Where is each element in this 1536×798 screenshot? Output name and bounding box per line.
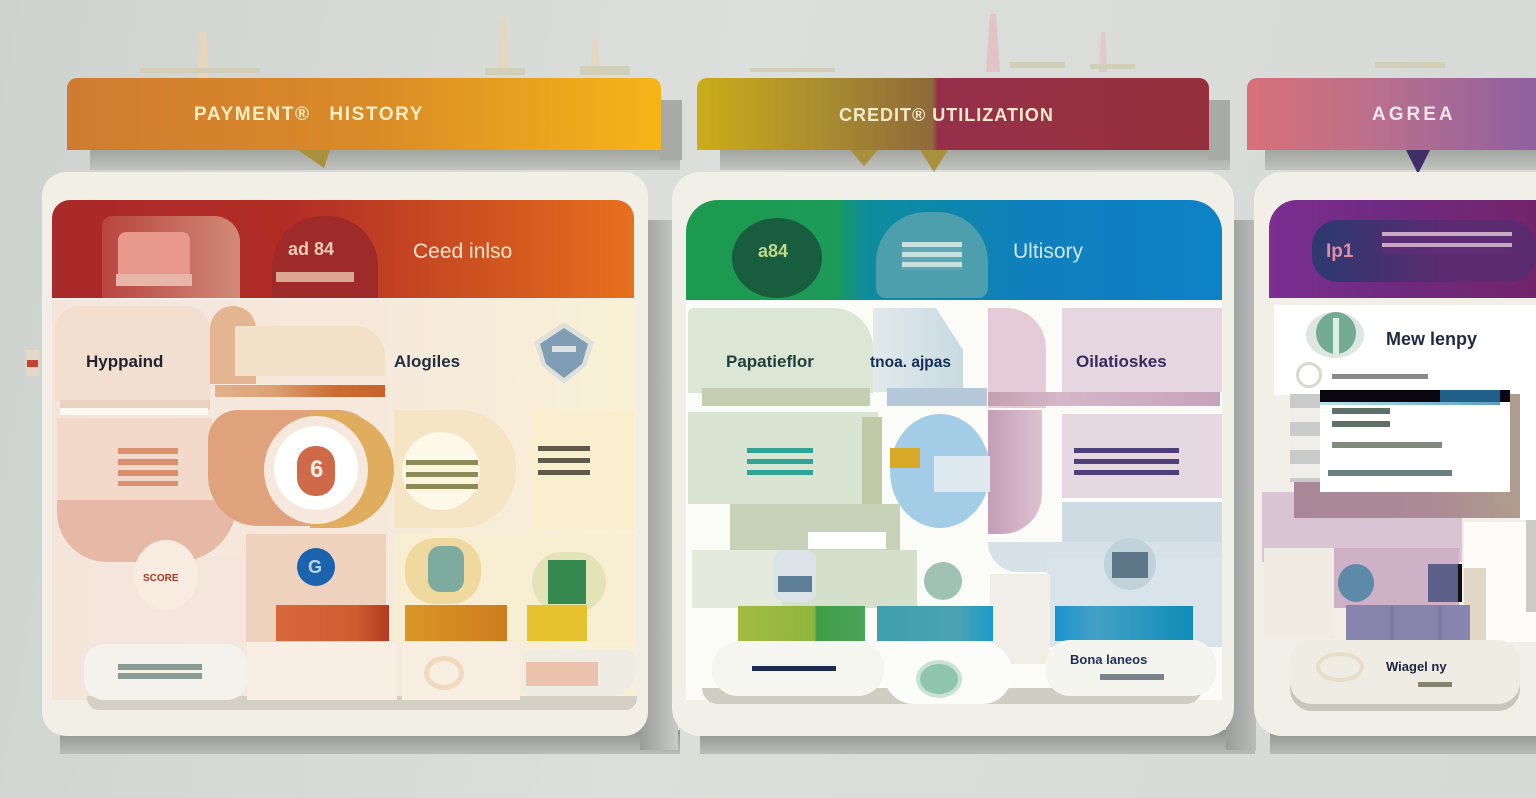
panel 3 xyxy=(1254,172,1536,736)
icon: slate square xyxy=(1428,564,1462,602)
green lower card xyxy=(730,504,900,574)
header icon 2 xyxy=(272,216,378,298)
banner title: PAYMENT® HISTORY xyxy=(194,104,424,125)
icon: small doc xyxy=(774,550,816,602)
bottom coin icon xyxy=(424,656,464,690)
popup card xyxy=(1320,390,1510,492)
banner title: CREDIT® UTILIZATION xyxy=(839,105,1054,125)
lower mid card xyxy=(246,534,386,642)
pill 3 xyxy=(1046,640,1216,696)
content white xyxy=(1274,305,1536,395)
row 2 big blob xyxy=(208,410,378,526)
header icon 2: ad 84 xyxy=(288,239,334,259)
body tint xyxy=(52,300,636,700)
header label: Ceed inlso xyxy=(413,240,512,263)
banner title: AGREA xyxy=(1372,104,1456,125)
label green: Papatieflor xyxy=(726,352,814,371)
icon: data block xyxy=(1104,538,1156,590)
list text top xyxy=(1332,374,1428,379)
row 2 left card top xyxy=(57,418,212,500)
cream side xyxy=(1464,568,1486,640)
pink top card xyxy=(1062,308,1222,392)
pink mid oval xyxy=(988,410,1042,534)
row 1 teardrop xyxy=(210,306,256,384)
purple bar xyxy=(1346,605,1470,641)
green lower left xyxy=(692,550,782,608)
header inner blob xyxy=(1312,220,1536,282)
blue lower card 2 xyxy=(988,542,1222,572)
row 2 gold crescent xyxy=(310,412,394,528)
pink top oval xyxy=(988,308,1046,408)
bar blue xyxy=(1055,606,1193,641)
pink shadow xyxy=(988,392,1220,406)
icon: small teal xyxy=(924,562,962,600)
pill 2 with icon xyxy=(884,642,1012,704)
bottom pill 2 xyxy=(247,642,397,700)
bottom pill 1 xyxy=(84,644,247,700)
lilac centre xyxy=(1334,548,1459,608)
row 2 right card xyxy=(532,412,634,530)
icon: blue coin xyxy=(890,414,990,528)
icon: green tile xyxy=(532,552,606,612)
header band xyxy=(1269,200,1536,298)
bar green xyxy=(738,606,865,641)
panel 1 xyxy=(42,172,648,736)
bottom pill 4 xyxy=(522,650,636,696)
lilac lower xyxy=(1262,492,1462,562)
bar orange xyxy=(405,605,507,641)
grey bit xyxy=(1526,512,1536,612)
panel 2 xyxy=(672,172,1234,736)
card shadow xyxy=(1294,482,1520,518)
icon: shield badge xyxy=(534,322,594,384)
blue shadow xyxy=(887,388,987,406)
popup text row 2 xyxy=(1328,470,1452,476)
banner: payment history xyxy=(67,78,661,150)
icon: green leaf xyxy=(1306,312,1364,358)
green top card xyxy=(688,308,873,393)
white right column xyxy=(1520,395,1536,520)
header inner blob: Ip1 xyxy=(1326,241,1353,262)
blue lower card 3 xyxy=(1047,557,1222,647)
header icon 1: a84 xyxy=(758,241,788,261)
row 2 coin icon xyxy=(394,410,516,528)
bar yellow xyxy=(527,605,587,641)
row 1 label: Hyppaind xyxy=(86,352,163,371)
header label: Ultisory xyxy=(1013,240,1083,263)
left list ring xyxy=(1296,362,1322,388)
header band xyxy=(686,200,1222,300)
card right shadow xyxy=(1494,394,1520,504)
cream patch xyxy=(990,574,1050,664)
header icon 2 xyxy=(876,212,988,298)
pill 1 xyxy=(712,642,884,696)
popup text row xyxy=(1332,442,1442,448)
header icon 1 xyxy=(732,218,822,298)
icon list xyxy=(1290,394,1322,482)
row 2 ring icon: 6 xyxy=(310,456,323,483)
heading: Mew lenpy xyxy=(1386,329,1477,349)
pill 3: Bona laneos xyxy=(1070,652,1147,667)
row 1 left card xyxy=(55,306,210,401)
row 1 mid card xyxy=(235,326,385,376)
icon: blue circle xyxy=(297,548,335,586)
lower left badge xyxy=(134,540,198,610)
lower left badge: SCORE xyxy=(143,573,179,584)
bottom pill: Wiagel ny xyxy=(1386,659,1447,674)
blue top card xyxy=(873,308,963,392)
white base xyxy=(686,300,1222,700)
green mid card xyxy=(688,412,878,504)
header band xyxy=(52,200,634,298)
white column xyxy=(1464,522,1536,642)
side marker xyxy=(26,350,39,376)
icon: blue dot xyxy=(1338,564,1374,602)
decorative spikes above banners xyxy=(140,14,1445,172)
bottom pill xyxy=(1290,640,1520,704)
icon: blue circle: G xyxy=(308,557,322,577)
pink mid card xyxy=(1062,414,1222,498)
label purple: Oilatioskes xyxy=(1076,352,1167,371)
popup blue underline xyxy=(1320,402,1500,405)
banner: credit utilization xyxy=(697,78,1209,150)
popup lines xyxy=(1332,408,1390,430)
cream lower xyxy=(1264,548,1334,638)
label blue: tnoa. ajpas xyxy=(870,354,951,371)
white notch xyxy=(808,532,886,549)
purple lines xyxy=(1074,448,1179,478)
blue lower card xyxy=(1062,502,1222,542)
pills shadow xyxy=(87,696,637,710)
row 2 ring icon xyxy=(264,416,368,524)
green lines xyxy=(747,448,813,476)
bar teal xyxy=(877,606,993,641)
row 2 left card bottom xyxy=(57,500,237,562)
header icon 1 xyxy=(102,216,240,298)
row 2 highlight xyxy=(60,408,208,415)
icon: teal round xyxy=(405,538,481,604)
lower right card xyxy=(394,534,634,642)
row 1 shadow bar xyxy=(60,400,210,410)
green dark side xyxy=(862,417,882,517)
banner: third factor xyxy=(1247,78,1536,150)
bottom tag xyxy=(526,662,598,686)
green shadow xyxy=(702,388,870,406)
pills shadow xyxy=(702,688,1202,704)
row 2 left text xyxy=(118,448,178,486)
green lower card 2 xyxy=(692,550,917,608)
row 1 label 2: Alogiles xyxy=(394,352,460,371)
row 1 stripe xyxy=(215,385,385,397)
bottom pill 3 xyxy=(402,642,520,700)
bar red xyxy=(276,605,389,641)
lower left card xyxy=(92,557,248,642)
